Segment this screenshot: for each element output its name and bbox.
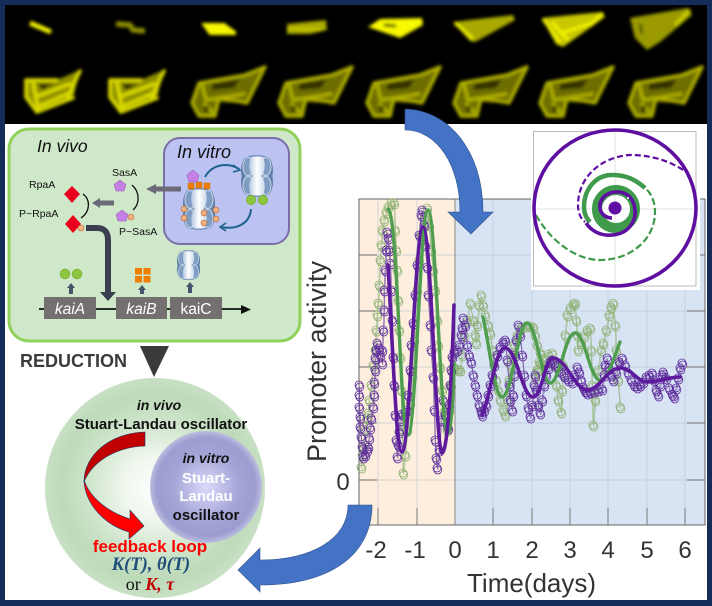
gene line [39, 305, 251, 314]
x axis tick labels: 0 [448, 537, 462, 564]
label: feedback loop: feedback loop [93, 537, 207, 556]
icon: P~RpaA [65, 215, 84, 233]
panel: entrained phase background [359, 199, 455, 525]
icon: KaiC hexamer [177, 250, 200, 280]
label: K(T), theta(T): K(T), θ(T) [111, 555, 190, 575]
x axis tick labels: -2 [365, 537, 387, 564]
arrow: cycle [205, 165, 251, 231]
panel: in vitro [164, 138, 289, 244]
purple fit curve [388, 227, 680, 453]
y axis label: Promoter activity [302, 260, 332, 462]
x axis tick labels: 6 [678, 537, 692, 564]
in vitro oscillator circle: Landau [179, 488, 233, 505]
icon: phosphorylated KaiC [181, 170, 219, 230]
x axis tick labels: 2 [525, 537, 539, 564]
icon: SasA [114, 180, 126, 191]
arrow: from microscopy to chart [405, 109, 493, 234]
icon: KaiB tetramer [135, 268, 150, 282]
arrow: SasA phosphorylation [132, 185, 138, 210]
green fit curve [388, 209, 620, 435]
in vitro oscillator circle: Stuart- [182, 470, 230, 487]
arrow: RpaA phosphorylation [81, 194, 88, 218]
gene: kaiC [170, 297, 222, 319]
heading: in vitro: In vitro [177, 142, 231, 162]
icon: P~SasA [116, 210, 134, 221]
purple data series [359, 210, 683, 470]
arrow: feedback loop [84, 432, 145, 539]
purple spiral [534, 130, 696, 286]
x axis tick labels: 3 [563, 537, 577, 564]
x axis tick labels: 5 [640, 537, 654, 564]
green spiral [536, 175, 655, 260]
arrow: from chart to reduction [238, 505, 372, 592]
gene: kaiB [116, 297, 167, 319]
arrow: reduction triangle [140, 346, 169, 377]
in vivo oscillator label: Stuart-Landau oscillator [75, 416, 247, 433]
label: P~SasA: P~SasA [119, 226, 157, 238]
x axis tick labels [365, 537, 692, 564]
arrows: gene products [67, 282, 194, 294]
in vitro oscillator circle: in vitro [183, 450, 230, 466]
icon: RpaA [64, 186, 80, 203]
gene: kaiA [44, 297, 96, 319]
label: reduction: REDUCTION [20, 351, 127, 371]
label: SasA: SasA [112, 167, 137, 179]
microscopy image strip [5, 5, 707, 124]
arrow: transcription activation [86, 228, 116, 301]
x axis tick labels: 1 [486, 537, 500, 564]
label: or K, tau: or K, τ [126, 574, 175, 594]
icon: KaiA dimer [60, 269, 82, 279]
green data series [361, 203, 621, 475]
phase plot inset [531, 127, 700, 290]
oscillator diagram [45, 378, 265, 598]
in vitro oscillator circle [150, 431, 262, 543]
y axis zero: 0 [336, 469, 350, 496]
gene: kaiB: kaiB [126, 301, 157, 318]
panel: free-run phase background [455, 199, 705, 525]
in vitro oscillator circle: oscillator [173, 507, 240, 524]
x axis label: Time(days) [467, 568, 596, 598]
x axis tick labels: -1 [404, 537, 426, 564]
gene: kaiC: kaiC [180, 301, 212, 318]
label: P~RpaA: P~RpaA [19, 208, 58, 220]
label: RpaA: RpaA [29, 179, 55, 191]
icon: KaiC with KaiA [241, 156, 273, 205]
gene: kaiA: kaiA [55, 301, 85, 318]
in vivo label: in vivo [137, 397, 182, 413]
arrow: KaiC to SasA [146, 184, 181, 194]
heading: in vivo: In vivo [37, 136, 88, 156]
arrow: SasA to RpaA [92, 198, 114, 208]
x axis tick labels: 4 [601, 537, 615, 564]
panel: in vivo [9, 129, 300, 341]
chart: promoter activity over time [302, 199, 705, 598]
in vivo oscillator circle [45, 378, 265, 598]
